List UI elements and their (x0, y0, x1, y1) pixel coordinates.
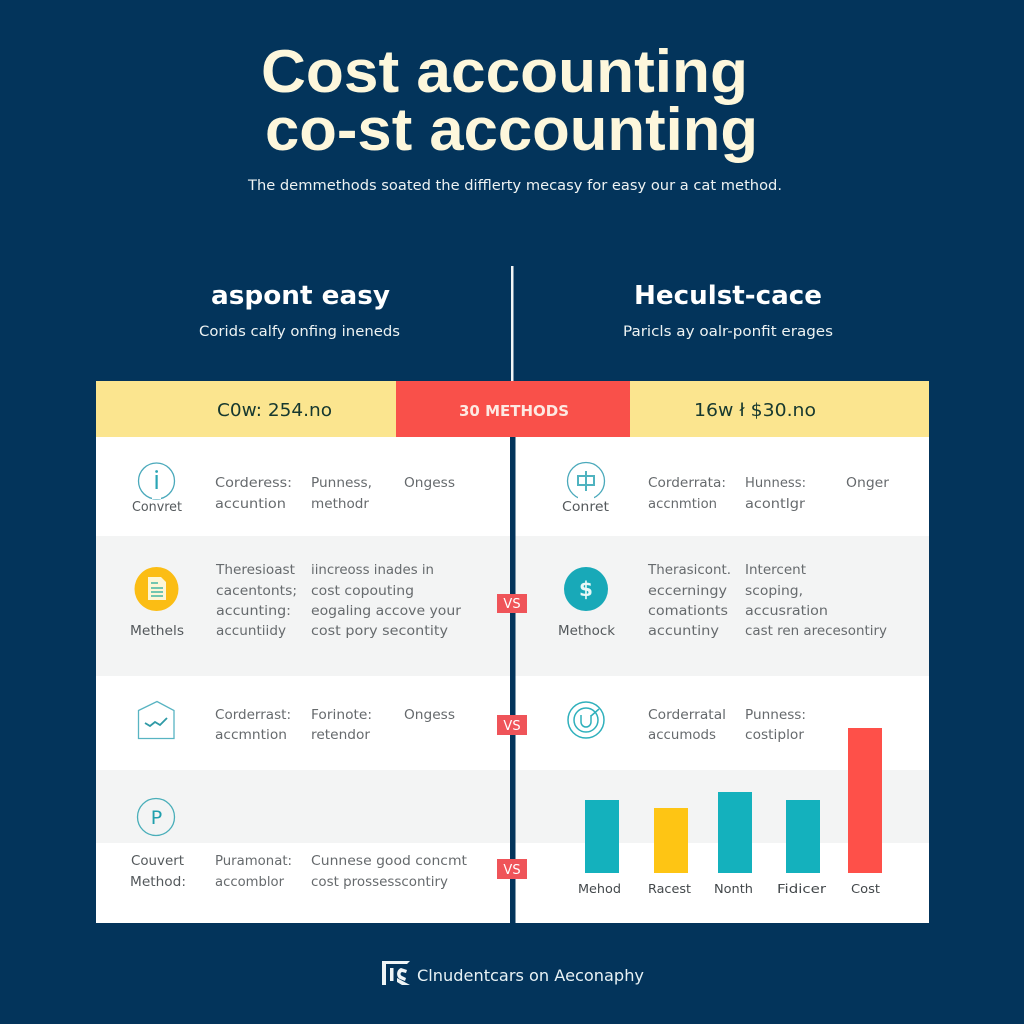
row 2 left: accunting: (216, 604, 291, 619)
row 2 right (558, 563, 887, 639)
icon: P circle (138, 798, 174, 836)
bar chart: Nonth (714, 881, 753, 896)
row 4 left: cost prossesscontiry (311, 875, 448, 890)
row 2 right: eccerningy (648, 584, 727, 599)
row 3 left: Ongess (404, 708, 455, 723)
title (261, 38, 758, 163)
row 2 left (130, 563, 462, 639)
left column heading: aspont easy (211, 281, 390, 311)
bar chart: Racest (648, 881, 691, 896)
row 4 left: Couvert (131, 854, 184, 869)
row 1 left: Ongess (404, 476, 455, 491)
row 4 left: Method: (130, 875, 186, 890)
left column heading (199, 281, 400, 340)
row 2 left: Theresioast (215, 563, 295, 578)
icon: info circle (138, 463, 174, 499)
row 3 left: accmntion (215, 728, 287, 743)
row 2 right: comationts (648, 604, 728, 619)
row 1 right (562, 462, 890, 515)
row 3 left (138, 702, 455, 743)
right column heading: Heculst-cace (634, 281, 822, 311)
icon: house with trend line (138, 702, 174, 738)
footer: Clnudentcars on Aeconaphy (417, 966, 644, 985)
row 3 right: Punness: (745, 708, 806, 723)
row 1 left: accuntion (215, 497, 286, 512)
right column heading (623, 281, 833, 340)
VS badge 3: VS (503, 863, 521, 878)
row 1 right: Onger (846, 476, 890, 491)
VS badge 2 (497, 715, 527, 735)
footer (382, 961, 644, 985)
header band: 30 METHODS (459, 402, 569, 420)
centre spine (510, 437, 516, 923)
bar chart (578, 728, 882, 896)
row 3 right: accumods (648, 728, 716, 743)
VS badge 2: VS (503, 719, 521, 734)
row 1 right: Corderrata: (648, 476, 726, 491)
bar chart: Mehod (578, 881, 621, 896)
row 2 left: eogaling accove your (311, 604, 462, 619)
row 2 left: cost copouting (311, 584, 414, 599)
row 2 right: accusration (745, 604, 828, 619)
icon: dollar on teal disc (564, 567, 608, 611)
row 4 left: Cunnese good concmt (311, 854, 467, 869)
icon: dollar on teal disc: $ (579, 577, 593, 601)
row 3 left: retendor (311, 728, 371, 743)
row 2 left: accuntiidy (216, 624, 286, 639)
bar chart: Fidicer (777, 881, 827, 896)
row 3 right (568, 702, 806, 743)
row 1 left: Punness, (311, 476, 372, 491)
row 1 left: methodr (311, 497, 370, 512)
VS badge 1: VS (503, 597, 521, 612)
row 1 right: acontlgr (745, 497, 806, 512)
row 1 right: accnmtion (648, 497, 717, 512)
row 2 right: Methock (558, 624, 615, 639)
subtitle: The demmethods soated the difflerty mecasy for easy our a cat method. (247, 178, 782, 194)
icon: target spiral (568, 702, 604, 738)
row 4 left: accomblor (215, 875, 285, 890)
icon: P circle: P (151, 807, 162, 829)
row 4 left: Puramonat: (215, 854, 292, 869)
row 3 left: Corderrast: (215, 708, 291, 723)
title: co-st accounting (265, 96, 758, 163)
row 3 right: costiplor (745, 728, 805, 743)
VS badge 1 (497, 594, 527, 613)
row 2 right: scoping, (745, 584, 803, 599)
row 2 left: cacentonts; (216, 584, 297, 599)
row 1 left: Corderess: (215, 476, 292, 491)
top centre divider (511, 266, 514, 381)
row 1 left: Convret (132, 500, 182, 515)
right column heading: Paricls ay oalr-ponfit erages (623, 324, 833, 340)
icon: document on yellow disc (134, 567, 178, 611)
row 2 right: Therasicont. (647, 563, 731, 578)
bar chart: Cost (851, 881, 880, 896)
comparison table (96, 381, 929, 923)
row 1 right: Conret (562, 500, 609, 515)
row 2 right: cast ren arecesontiry (745, 624, 887, 639)
row 2 left: Methels (130, 624, 184, 639)
title: Cost accounting (261, 38, 748, 105)
row 4 left (130, 798, 467, 890)
header band (96, 381, 929, 437)
row 2 left: iincreoss inades in (311, 563, 434, 578)
row 3 right: Corderratal (648, 708, 726, 723)
row 2 right: accuntiny (648, 624, 719, 639)
icon: footer logo (382, 961, 410, 985)
header band: 16w ł $30.no (694, 400, 816, 421)
row 1 left (132, 463, 455, 515)
row 2 left: cost pory secontity (311, 624, 448, 639)
icon: circle glyph (568, 462, 604, 500)
VS badge 3 (497, 859, 527, 879)
row 1 right: Hunness: (745, 476, 806, 491)
left column heading: Corids calfy onfing ineneds (199, 324, 400, 340)
row 3 left: Forinote: (311, 708, 372, 723)
row 2 right: Intercent (745, 563, 806, 578)
header band: C0w: 254.no (217, 400, 332, 421)
